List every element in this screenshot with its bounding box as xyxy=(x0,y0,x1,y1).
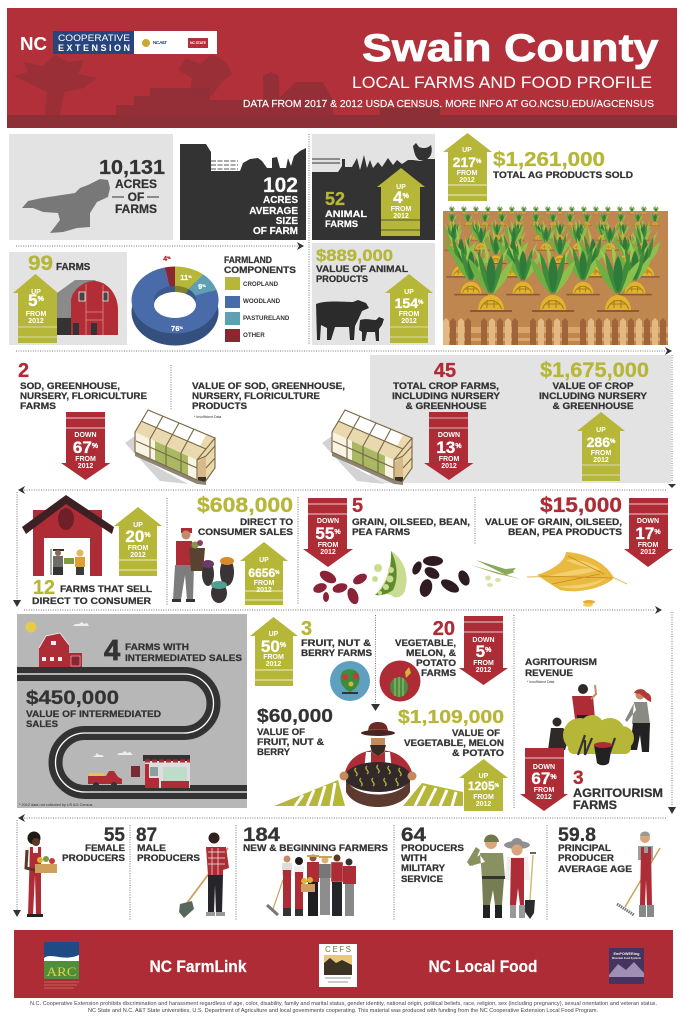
new and beginning farmers text: 184 xyxy=(243,825,281,846)
arrow: down 13 percent: 2012 xyxy=(441,463,457,470)
chart: farmland components donut: % xyxy=(188,274,192,279)
arrow: down 67 percent agritourism: 67 xyxy=(531,769,550,788)
soldier xyxy=(467,834,505,918)
intermediated value text: SALES xyxy=(26,719,58,730)
military service text xyxy=(401,825,464,885)
intermediated value text: $450,000 xyxy=(26,688,119,709)
arrow: up 20 percent xyxy=(114,507,162,576)
arrow: down 17 percent: 2012 xyxy=(640,549,656,556)
section: sod greenhouse farms: NURSERY, FLORICULTURE xyxy=(20,391,147,402)
section: sod greenhouse farms: 2 xyxy=(18,360,29,382)
illustration: greenhouse two xyxy=(322,410,412,485)
panel: animal products value: PRODUCTS xyxy=(316,274,368,285)
panel: animal products value: VALUE OF ANIMAL xyxy=(316,264,408,275)
bushes xyxy=(563,715,634,754)
arrow: up 20 percent: FROM xyxy=(128,545,148,552)
vegetable value text: & POTATO xyxy=(452,748,504,759)
arrow: down 17 percent xyxy=(624,498,673,567)
county map xyxy=(22,179,110,233)
arrow: down 67 percent agritourism: % xyxy=(550,774,557,781)
arrow: down 55 percent: FROM xyxy=(318,542,338,549)
total crop farms text: 45 xyxy=(434,360,456,382)
panel: animal products value xyxy=(312,243,435,345)
arrow: up 50 percent: 50 xyxy=(261,637,280,656)
fruit nut berry farms text xyxy=(301,618,372,659)
icon: barn xyxy=(57,280,118,335)
illustration: farmer holding basket of money xyxy=(274,722,463,807)
arrow: down 55 percent: DOWN xyxy=(317,518,339,525)
arrow: up 4 percent: 2012 xyxy=(393,213,409,220)
illustration: wheat xyxy=(527,552,627,607)
panel: acres of farms: ACRES xyxy=(115,177,157,191)
illustration: pea pod xyxy=(372,551,407,597)
agritourism farms text: FARMS xyxy=(573,800,617,812)
arrow: up 20 percent: 2012 xyxy=(130,552,146,559)
illustration: greenhouse xyxy=(125,410,215,485)
fruit nut berry farms text: FRUIT, NUT & xyxy=(301,638,371,649)
arrow: up 154 percent: 154 xyxy=(395,295,418,311)
arrow: up 154 percent xyxy=(385,274,433,343)
female producers text xyxy=(62,825,125,864)
illustration: man with shovel xyxy=(179,832,229,918)
NC FarmLink: NC FarmLink xyxy=(150,957,247,976)
arrow: up 50 percent: UP xyxy=(269,631,279,638)
legal disclaimer: N.C. Cooperative Extension prohibits discrimination and harassment regardless of age, color, disability, family and marital status, gender identity, national origin, political beliefs, race, religion, sex (including pregnancy), sexual orientation and veteran status. xyxy=(30,1001,657,1007)
panel: animal products value: $889,000 xyxy=(316,246,393,265)
chart: farmland components donut: 4 xyxy=(163,256,167,263)
arrow: up 286 percent xyxy=(577,412,625,481)
arrow: up 50 percent xyxy=(250,617,298,686)
person top xyxy=(572,684,596,721)
total crop farms text: & GREENHOUSE xyxy=(406,401,486,412)
vegetable value text: $1,109,000 xyxy=(398,707,504,727)
principal producer age text: 59.8 xyxy=(558,825,596,846)
arrow: down 67 percent sod xyxy=(61,412,110,480)
icon: fruit plant circle xyxy=(330,661,370,701)
crop value text: VALUE OF CROP xyxy=(552,381,634,392)
intermediated value text xyxy=(26,688,161,730)
arrow: up 154 percent: FROM xyxy=(399,311,419,318)
extension logo: EXTENSION xyxy=(58,43,130,53)
arrow: down 5 percent: DOWN xyxy=(472,637,495,644)
footnote: * 2012 data not collected by US AG Census xyxy=(19,803,93,807)
sod value text xyxy=(192,381,345,419)
icon: pickup truck xyxy=(88,771,122,788)
arrow: down 13 percent xyxy=(424,412,474,480)
legend: farmland components: CROPLAND xyxy=(243,281,279,288)
illustration: red barn with farmers xyxy=(22,495,114,576)
chart: farmland components donut: 9 xyxy=(198,282,202,291)
arrow: up 1205 percent: 2012 xyxy=(476,801,491,808)
fruit nut berry farms text: BERRY FARMS xyxy=(301,648,372,659)
sod value text: NURSERY, FLORICULTURE xyxy=(192,391,320,402)
agritourism farms text: AGRITOURISM xyxy=(573,788,663,800)
total crop farms text: INCLUDING NURSERY xyxy=(392,391,501,402)
extension logo: COOPERATIVE xyxy=(58,33,130,43)
arrow: up 5 percent: UP xyxy=(31,289,41,296)
arrow: up 1205 percent xyxy=(459,759,508,811)
arrow: up 20 percent: UP xyxy=(133,522,143,529)
panel: average farm size: SIZE xyxy=(276,216,298,227)
clouds xyxy=(73,622,133,757)
agritourism farms text: 3 xyxy=(573,768,584,789)
female producers text: PRODUCERS xyxy=(62,853,125,864)
person right xyxy=(625,689,651,752)
direct to consumer sales text xyxy=(197,494,293,538)
total crop farms text: TOTAL CROP FARMS, xyxy=(393,381,499,392)
arrow: down 67 percent sod: DOWN xyxy=(74,432,97,439)
figures in barn door xyxy=(51,549,85,575)
agritourism farms text xyxy=(573,768,663,812)
arrow: down 67 percent sod: % xyxy=(92,443,99,450)
panel: acres of farms: 10,131 xyxy=(99,157,165,179)
arrow: down 55 percent: 2012 xyxy=(320,549,336,556)
extension logo: NC STATE xyxy=(190,41,207,45)
logo: CEFS xyxy=(319,944,357,987)
four farms text xyxy=(104,635,242,667)
grain farms text: GRAIN, OILSEED, BEAN, xyxy=(352,517,470,528)
farmer with shovel xyxy=(504,838,536,919)
vegetable farms text: VEGETABLE, xyxy=(395,638,456,649)
arrow: up 217 percent xyxy=(443,133,492,201)
total ag products sold: TOTAL AG PRODUCTS SOLD xyxy=(493,170,633,181)
new and beginning farmers text xyxy=(243,825,388,854)
total crop farms text xyxy=(392,360,501,412)
arrow: down 67 percent agritourism: DOWN xyxy=(533,764,555,771)
icon: cow and calf xyxy=(316,300,384,341)
farm silhouette xyxy=(7,54,677,128)
arrow: down 55 percent: % xyxy=(334,529,341,536)
arrow: up 217 percent: 217 xyxy=(453,154,476,170)
vegetable farms text xyxy=(395,618,456,679)
arrow: down 5 percent: FROM xyxy=(473,660,494,667)
illustration: older farmer with rake xyxy=(617,832,660,917)
military service text: MILITARY xyxy=(401,863,446,874)
vegetable value text xyxy=(398,707,504,759)
fruit value text: FRUIT, NUT & xyxy=(257,737,324,748)
principal producer age text: AVERAGE AGE xyxy=(558,864,632,875)
illustration: soldier and farmer xyxy=(467,834,536,919)
arrow: up 286 percent: % xyxy=(610,439,616,445)
arrow: down 55 percent: 55 xyxy=(315,524,334,543)
logo: CEFS: CEFS xyxy=(325,945,351,954)
panel: intermediated sales xyxy=(17,614,247,808)
legend: farmland components: COMPONENTS xyxy=(224,265,296,276)
NC Local Food: NC Local Food xyxy=(428,957,538,976)
total ag products sold: $1,261,000 xyxy=(493,149,605,171)
arrow: up 4 percent: UP xyxy=(396,184,406,191)
farms that sell direct text: FARMS THAT SELL xyxy=(60,584,152,595)
section: sod greenhouse farms: FARMS xyxy=(20,401,56,412)
arrow: up 50 percent: % xyxy=(280,642,287,649)
illustration: black beans xyxy=(410,556,472,598)
data source line: DATA FROM 2017 & 2012 USDA CENSUS. MORE INFO AT GO.NCSU.EDU/AGCENSUS xyxy=(243,99,654,110)
title: Swain County xyxy=(362,26,659,69)
chart: farmland components donut xyxy=(132,255,219,346)
header banner xyxy=(7,8,677,128)
arrow: up 20 percent: % xyxy=(144,532,151,539)
icon: watermelon circle xyxy=(380,660,420,702)
panel: total farms: FARMS xyxy=(56,262,91,273)
arrow: up 6656 percent: % xyxy=(275,570,280,576)
legal disclaimer: NC State and N.C. A&T State universities, U.S. Department of Agriculture and local governments cooperating. This material was produced with funding from the NC Cooperative Extension Local Food Program. xyxy=(88,1008,598,1014)
panel: animal farms: FARMS xyxy=(325,219,358,230)
footer banner xyxy=(14,930,673,998)
grain farms text xyxy=(352,495,470,538)
logo: ARC: ARC xyxy=(46,964,76,979)
agritourism revenue text: AGRITOURISM xyxy=(525,657,597,667)
arrow: down 13 percent: % xyxy=(455,443,462,450)
agritourism revenue text xyxy=(525,657,597,684)
arrow: down 67 percent sod: FROM xyxy=(75,456,96,463)
legend: farmland components: PASTURELAND xyxy=(243,315,290,322)
picket fence xyxy=(443,318,668,345)
sod value text: PRODUCTS xyxy=(192,401,247,412)
arrow: up 4 percent: 4 xyxy=(393,188,403,207)
arrow: up 1205 percent: FROM xyxy=(473,794,494,801)
logo: EmPOWERing: Mountain Food Systems xyxy=(612,957,642,960)
panel: total farms: 99 xyxy=(28,252,53,275)
extension logo: NC xyxy=(20,34,47,54)
arrow: up 6656 percent xyxy=(240,542,288,605)
section: sod greenhouse farms: SOD, GREENHOUSE, xyxy=(20,381,120,392)
vegetable farms text: POTATO xyxy=(416,658,456,669)
arrow: up 1205 percent: 1205 xyxy=(468,779,495,793)
fruit value text: VALUE OF xyxy=(257,727,305,738)
vegetable farms text: FARMS xyxy=(421,668,456,679)
arrow: up 1205 percent: % xyxy=(495,783,500,789)
arrow: down 17 percent: 17 xyxy=(635,524,654,543)
military service text: SERVICE xyxy=(401,874,443,885)
logo: EmPOWERing: EmPOWERing xyxy=(614,952,640,956)
icon: small barn xyxy=(39,633,82,667)
arrow: down 5 percent: % xyxy=(485,647,492,654)
section: sod greenhouse farms xyxy=(18,360,147,412)
military service text: WITH xyxy=(401,853,427,864)
arrow: up 217 percent: 2012 xyxy=(459,177,475,184)
grain value text: VALUE OF GRAIN, OILSEED, xyxy=(485,517,622,528)
illustration: woman with crate xyxy=(26,832,57,917)
arrow: up 217 percent: FROM xyxy=(457,170,477,177)
farms that sell direct text: DIRECT TO CONSUMER xyxy=(32,596,151,607)
arrow: down 17 percent: DOWN xyxy=(637,518,659,525)
arrow: down 67 percent agritourism: FROM xyxy=(534,787,554,794)
grain value text xyxy=(485,494,622,538)
grain farms text: PEA FARMS xyxy=(352,527,410,538)
principal producer age text: PRINCIPAL xyxy=(558,843,611,854)
arrow: up 154 percent: % xyxy=(418,300,424,306)
arrow: up 20 percent: 20 xyxy=(125,527,144,546)
arrow: up 4 percent: % xyxy=(403,193,410,200)
principal producer age text xyxy=(558,825,632,875)
arrow: up 5 percent: FROM xyxy=(26,311,46,318)
panel: average farm size: AVERAGE xyxy=(249,206,298,217)
panel: average farm size xyxy=(180,144,306,240)
sod value text: VALUE OF SOD, GREENHOUSE, xyxy=(192,381,345,392)
arrow: up 6656 percent: UP xyxy=(259,557,269,564)
arrow: up 154 percent: UP xyxy=(404,289,414,296)
arrow: up 50 percent: 2012 xyxy=(266,661,281,668)
arrow: up 5 percent: 5 xyxy=(28,291,38,310)
vegetable farms text: 20 xyxy=(433,618,455,640)
arrow: up 217 percent: UP xyxy=(462,147,472,154)
arrow: down 67 percent sod: 2012 xyxy=(78,463,93,470)
arrow: up 286 percent: UP xyxy=(596,427,606,434)
arrow: up 5 percent xyxy=(13,274,58,343)
arrow: down 55 percent xyxy=(303,498,353,567)
total ag products sold xyxy=(493,149,633,181)
legal disclaimer xyxy=(30,1001,657,1014)
panel: acres of farms: FARMS xyxy=(115,202,157,216)
male producers text: PRODUCERS xyxy=(137,853,200,864)
arrow: up 286 percent: FROM xyxy=(591,450,611,457)
arrow: down 67 percent agritourism: 2012 xyxy=(536,794,552,801)
crop value text: & GREENHOUSE xyxy=(552,401,634,412)
icon: chicken xyxy=(413,143,432,160)
panel: total farms xyxy=(9,252,127,345)
illustration: money crop field xyxy=(443,204,668,345)
illustration: green beans xyxy=(471,560,521,587)
farms that sell direct text xyxy=(32,577,152,607)
logo: EmPOWERing xyxy=(609,948,644,984)
male producers text xyxy=(136,825,200,864)
panel: animal farms: 52 xyxy=(325,189,345,209)
arrow: down 13 percent: 13 xyxy=(436,438,455,457)
arrow: down 5 percent xyxy=(459,616,508,685)
arrow: up 286 percent: 286 xyxy=(587,434,610,450)
panel: crop farms xyxy=(370,355,671,483)
arrow: up 6656 percent: FROM xyxy=(254,580,274,587)
direct to consumer sales text: $608,000 xyxy=(197,494,293,517)
sod value text: * Insufficient Data xyxy=(194,415,221,419)
illustration: person with produce bag and baskets xyxy=(172,528,234,603)
new and beginning farmers text: NEW & BEGINNING FARMERS xyxy=(243,843,388,854)
extension logo xyxy=(20,31,217,54)
female producers text: FEMALE xyxy=(85,843,125,854)
arrow: up 286 percent: 2012 xyxy=(593,457,609,464)
arrow: up 4 percent xyxy=(377,168,425,236)
grain farms text: 5 xyxy=(352,495,363,517)
crop value text xyxy=(539,359,649,412)
panel: acres of farms xyxy=(9,134,173,240)
four farms text: 4 xyxy=(104,635,120,667)
arrow: down 13 percent: FROM xyxy=(439,456,459,463)
vegetable value text: VEGETABLE, MELON xyxy=(404,738,504,749)
person left xyxy=(548,718,570,750)
arrow: up 6656 percent: 6656 xyxy=(248,566,275,580)
illustration: group of farmers xyxy=(267,854,356,916)
panel: animal farms xyxy=(312,134,435,240)
extension logo: N.C. A&T xyxy=(153,40,167,45)
panel: average farm size: ACRES xyxy=(263,195,298,206)
military service text: 64 xyxy=(401,825,427,846)
illustration: people picking at bushes xyxy=(548,684,651,765)
direct to consumer sales text: CONSUMER SALES xyxy=(198,527,293,538)
chart: farmland components donut: 11 xyxy=(180,273,188,282)
legend: farmland components: WOODLAND xyxy=(243,298,281,305)
arrow: up 217 percent: % xyxy=(476,159,482,165)
four farms text: FARMS WITH xyxy=(125,642,189,653)
vegetable farms text: MELON, & xyxy=(406,648,456,659)
arrow: up 1205 percent: UP xyxy=(479,773,489,780)
arrow: down 13 percent: DOWN xyxy=(438,432,460,439)
chart: farmland components donut: 76 xyxy=(171,324,179,333)
principal producer age text: PRODUCER xyxy=(558,853,614,864)
panel: acres of farms: OF xyxy=(128,190,144,204)
four farms text: INTERMEDIATED SALES xyxy=(125,653,242,664)
road xyxy=(17,674,247,792)
icon: market shop xyxy=(131,755,190,788)
grain value text: BEAN, PEA PRODUCTS xyxy=(508,527,622,538)
fruit nut berry farms text: 3 xyxy=(301,618,312,640)
panel: average farm size: OF FARM xyxy=(253,226,298,237)
farms that sell direct text: 12 xyxy=(33,577,55,599)
subtitle: LOCAL FARMS AND FOOD PROFILE xyxy=(352,73,652,92)
fruit value text: BERRY xyxy=(257,747,291,758)
female producers text: 55 xyxy=(104,825,125,846)
illustration: red kidney beans xyxy=(312,568,369,606)
arrow: down 67 percent agritourism xyxy=(520,748,568,811)
grain value text: $15,000 xyxy=(540,494,622,517)
arrow: down 67 percent sod: 67 xyxy=(73,438,92,457)
bucket xyxy=(594,742,612,765)
arrow: up 154 percent: 2012 xyxy=(401,318,417,325)
arrow: up 5 percent: % xyxy=(38,296,45,303)
direct to consumer sales text: DIRECT TO xyxy=(240,517,293,528)
agritourism revenue text: * Insufficient Data xyxy=(527,680,554,684)
agritourism revenue text: REVENUE xyxy=(525,668,573,678)
legend: farmland components: FARMLAND xyxy=(224,255,272,266)
panel: average farm size: 102 xyxy=(263,174,298,197)
logo: ARC xyxy=(44,942,79,988)
arrow: down 5 percent: 5 xyxy=(476,642,485,661)
crop value text: $1,675,000 xyxy=(540,359,649,382)
panel: animal farms: ANIMAL xyxy=(325,209,367,220)
fruit value text: $60,000 xyxy=(257,706,333,726)
arrow: up 50 percent: FROM xyxy=(263,654,284,661)
vegetable value text: VALUE OF xyxy=(452,728,500,739)
arrow: down 17 percent: % xyxy=(654,529,661,536)
male producers text: 87 xyxy=(136,825,157,846)
chart: farmland components donut: % xyxy=(167,255,171,260)
military service text: PRODUCERS xyxy=(401,843,464,854)
intermediated value text: VALUE OF INTERMEDIATED xyxy=(26,709,161,720)
chart: farmland components donut: % xyxy=(179,325,183,330)
arrow: up 4 percent: FROM xyxy=(391,206,411,213)
arrow: up 6656 percent: 2012 xyxy=(256,587,272,594)
legend: farmland components: OTHER xyxy=(243,332,265,339)
icon: sun xyxy=(26,622,36,632)
arrow: up 5 percent: 2012 xyxy=(28,318,44,325)
male producers text: MALE xyxy=(137,843,166,854)
arrow: down 17 percent: FROM xyxy=(638,542,658,549)
crop value text: INCLUDING NURSERY xyxy=(539,391,648,402)
fruit value text xyxy=(257,706,333,758)
legend: farmland components xyxy=(224,255,296,342)
chart: farmland components donut: % xyxy=(202,283,206,288)
arrow: down 5 percent: 2012 xyxy=(476,667,491,674)
